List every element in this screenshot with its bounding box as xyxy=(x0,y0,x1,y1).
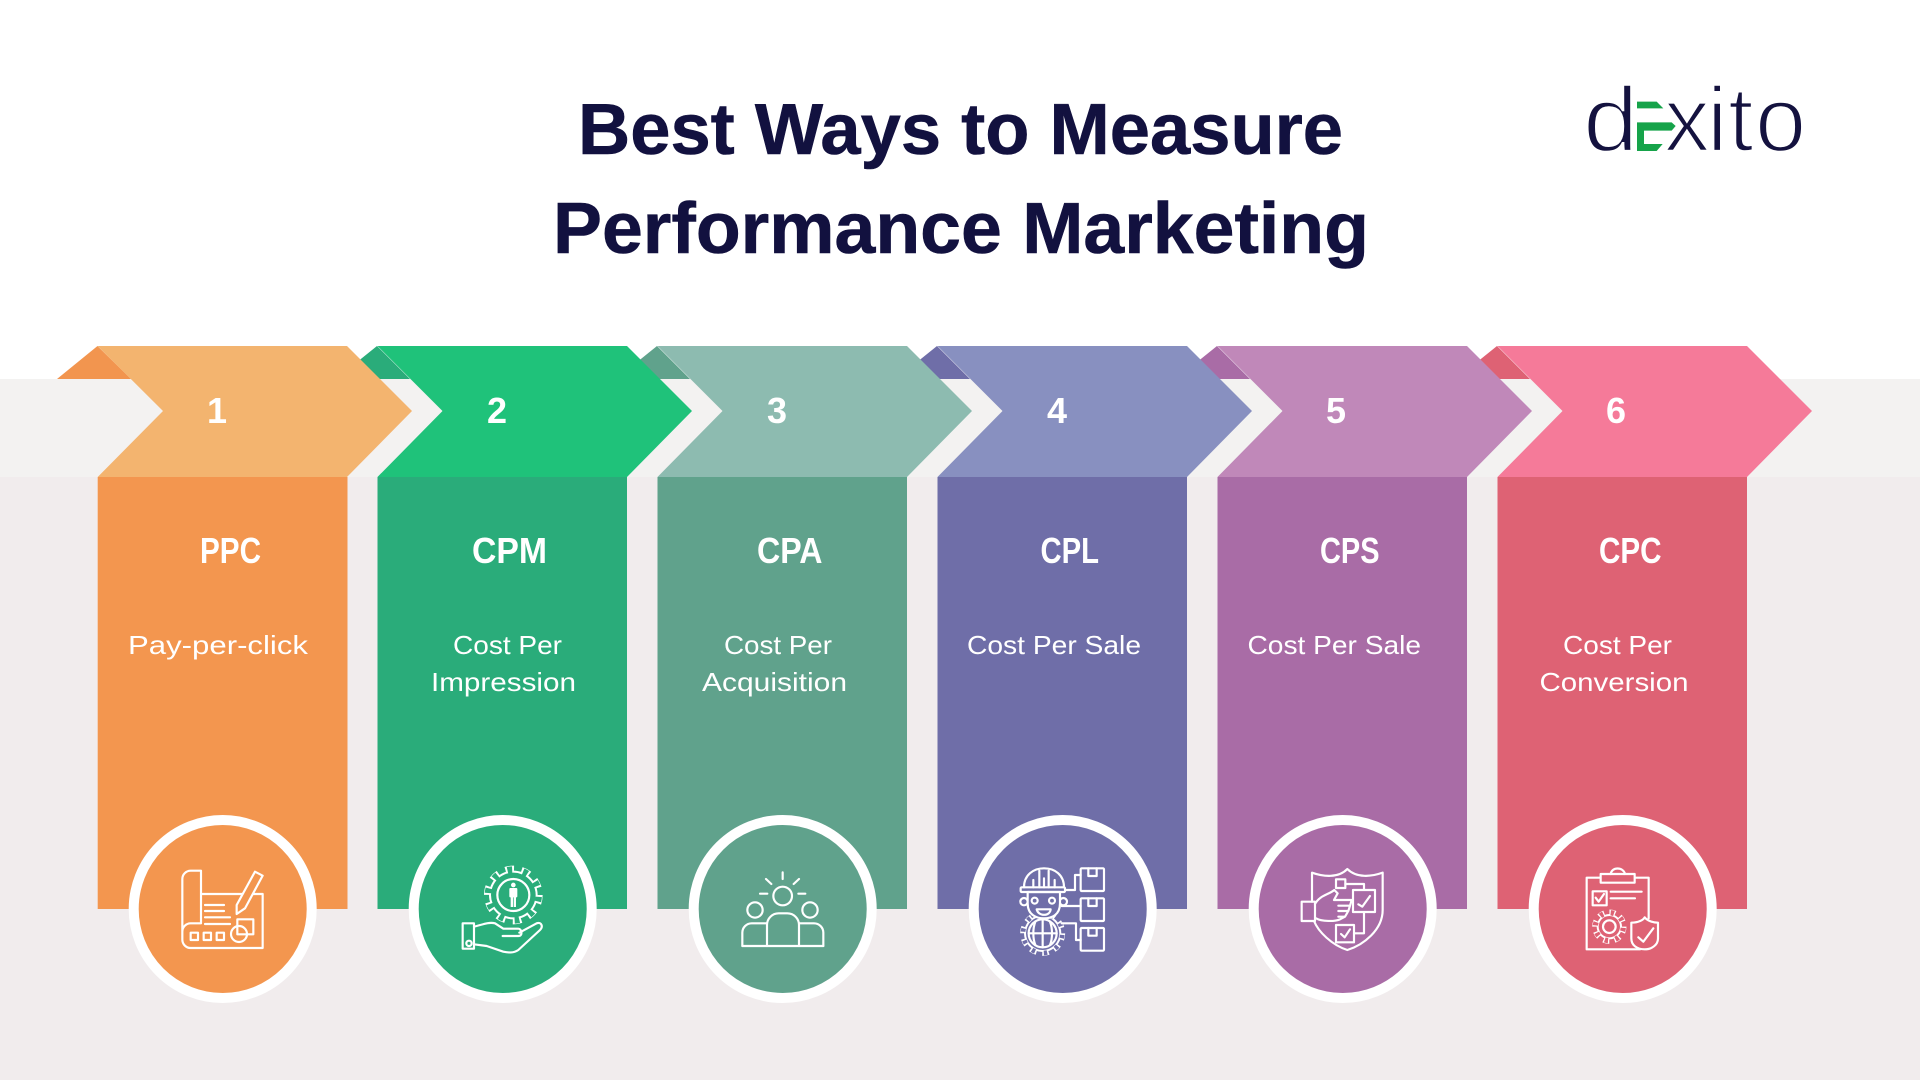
text: Cost Per Impression xyxy=(431,630,576,697)
text: Cost Per Acquisition: Cost Per xyxy=(724,630,832,660)
logo: dexito xyxy=(1583,68,1806,171)
icon: worker and boxes xyxy=(974,820,1152,998)
icon: blueprint and pencil xyxy=(134,820,312,998)
text: Cost Per Sale: Cost Per Sale xyxy=(1248,630,1421,660)
text: Pay-per-click: Pay-per-click xyxy=(128,630,309,660)
number: 4: 4 xyxy=(1047,390,1067,431)
column: 6 xyxy=(1498,477,1747,909)
heading: CPL: CPL xyxy=(1040,530,1099,571)
panel: 3 CPA xyxy=(616,346,972,998)
panel: 2 CPM xyxy=(336,346,692,998)
logo: dexito: t xyxy=(1728,69,1754,171)
number: 6: 6 xyxy=(1606,390,1626,431)
column: 2 xyxy=(378,477,627,909)
text: Cost Per Sale: Cost Per Sale xyxy=(967,630,1141,660)
heading: CPA: CPA xyxy=(757,530,822,571)
column: 4 xyxy=(938,477,1187,909)
text: Cost Per Conversion: Conversion xyxy=(1540,667,1688,697)
logo: dexito: x xyxy=(1664,69,1710,171)
text: Cost Per Conversion: Cost Per xyxy=(1563,630,1672,660)
fold: 4 xyxy=(896,346,970,379)
panel: 4 CPL xyxy=(896,346,1252,998)
panel: 5 CPS xyxy=(1176,346,1532,998)
arrow: 2 xyxy=(378,346,692,477)
icon: hand holding gear xyxy=(414,820,592,998)
logo: dexito: d xyxy=(1583,68,1638,171)
logo: dexito: i xyxy=(1707,69,1727,171)
number: 5: 5 xyxy=(1326,390,1346,431)
fold: 3 xyxy=(616,346,690,379)
fold: 6 xyxy=(1456,346,1530,379)
logo: dexito: o xyxy=(1755,69,1806,171)
arrow: 3 xyxy=(658,346,972,477)
text: Cost Per Impression: Impression xyxy=(431,667,576,697)
icon: clipboard gear shield xyxy=(1534,820,1712,998)
fold: 2 xyxy=(336,346,410,379)
text: Cost Per Impression: Cost Per xyxy=(453,630,562,660)
heading: CPM: CPM xyxy=(472,530,547,571)
title: Performance Marketing xyxy=(553,189,1369,269)
text: Cost Per Acquisition: Acquisition xyxy=(702,667,847,697)
fold: 5 xyxy=(1176,346,1250,379)
fold: 1 xyxy=(57,346,131,379)
icon: team xyxy=(694,820,872,998)
number: 2: 2 xyxy=(487,390,507,431)
arrow: 4 xyxy=(938,346,1252,477)
arrow: 5 xyxy=(1218,346,1532,477)
column: 3 xyxy=(658,477,907,909)
panel: 1 PPC xyxy=(57,346,412,998)
heading: CPC: CPC xyxy=(1599,530,1662,571)
text: Cost Per Conversion xyxy=(1540,630,1688,697)
icon: shield hand checklist xyxy=(1254,820,1432,998)
arrow: 6 xyxy=(1498,346,1812,477)
title: Best Ways to Measure xyxy=(578,90,1343,170)
column: 5 xyxy=(1218,477,1467,909)
text: Cost Per Acquisition xyxy=(702,630,847,697)
number: 3: 3 xyxy=(767,390,787,431)
number: 1: 1 xyxy=(207,390,227,431)
arrow: 1 xyxy=(98,346,412,477)
title xyxy=(553,90,1369,269)
heading: PPC: PPC xyxy=(200,530,261,571)
panel: 6 CPC xyxy=(1456,346,1812,998)
heading: CPS: CPS xyxy=(1320,530,1380,571)
column: 1 xyxy=(98,477,348,909)
